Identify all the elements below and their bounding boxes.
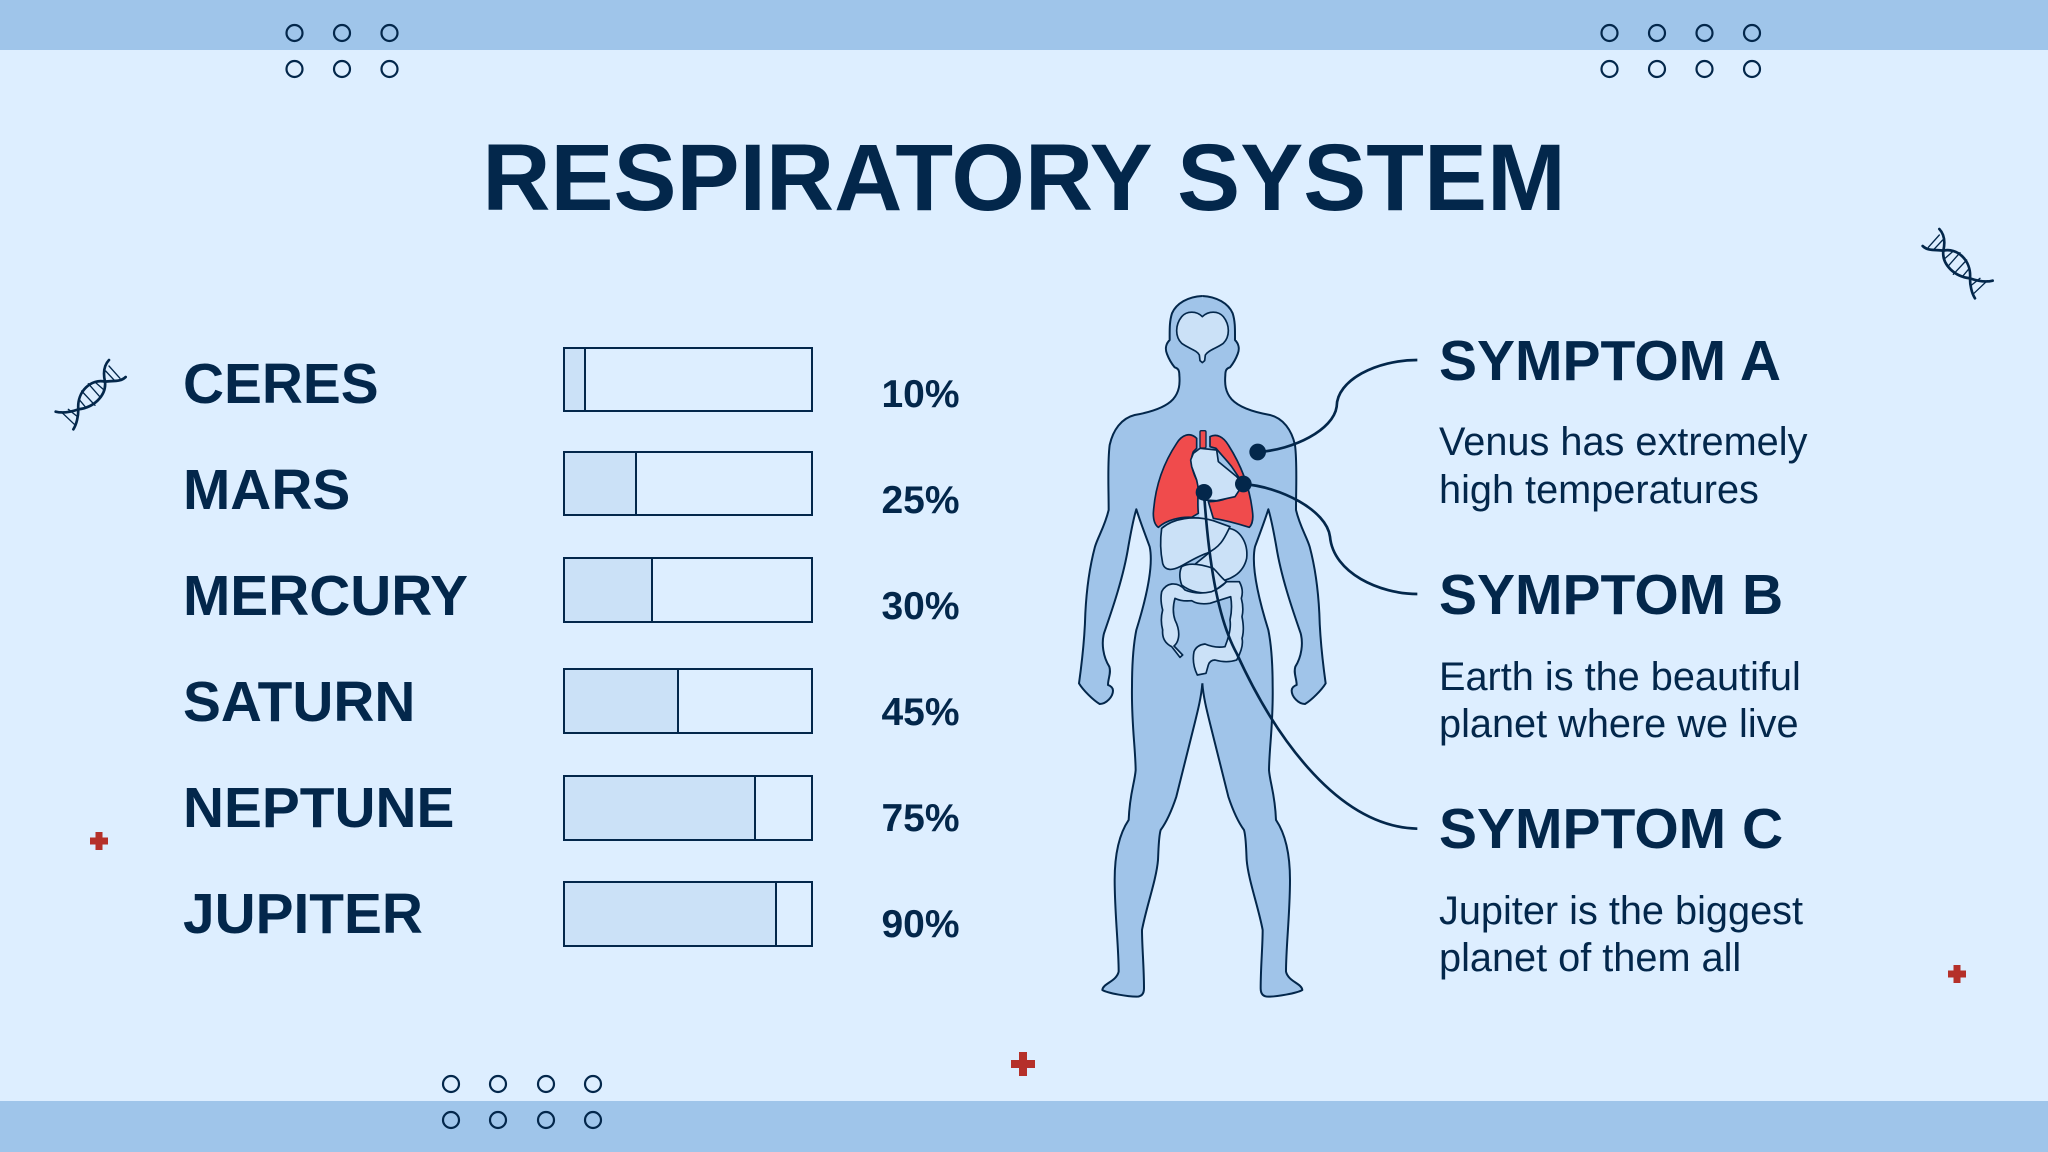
symptom B: [1439, 563, 1801, 746]
symptom A: high temperatures: [1439, 468, 1759, 512]
symptom A: SYMPTOM A: [1439, 329, 1781, 393]
connector lines: [1204, 360, 1417, 829]
row: Mars: 25%: [881, 479, 960, 522]
row: Mars: MARS: [183, 459, 350, 522]
dot grid: top right: [1602, 25, 1760, 77]
icon: dna right: [1923, 229, 1993, 298]
heart: [1191, 448, 1243, 501]
liver: [1161, 518, 1230, 569]
top band: [0, 0, 2048, 50]
lungs: [1153, 435, 1253, 527]
symptom B: SYMPTOM B: [1439, 563, 1783, 627]
row: Mercury: MERCURY: [183, 565, 468, 628]
icon: red cross right: [1948, 965, 1966, 983]
body silhouette: [1079, 296, 1326, 997]
connector dots: [1196, 444, 1266, 501]
dot grid: bottom: [443, 1076, 601, 1128]
gap between lungs: [1199, 497, 1213, 522]
symptom C: Jupiter is the biggest: [1439, 889, 1803, 933]
row: Saturn: [183, 669, 960, 734]
symptom A: Venus has extremely: [1439, 420, 1808, 464]
row: Mercury: 30%: [881, 585, 960, 628]
bottom band: [0, 1101, 2048, 1152]
row: Saturn: 45%: [881, 691, 960, 734]
row: Neptune: NEPTUNE: [183, 777, 454, 840]
symptom C: [1439, 797, 1803, 980]
dot grid: top left: [286, 25, 398, 77]
symptom A: [1439, 329, 1808, 512]
symptom C: planet of them all: [1439, 936, 1741, 980]
row: Mars: [183, 452, 960, 522]
panel: bar chart list: [183, 348, 960, 946]
row: Saturn: SATURN: [183, 671, 415, 734]
symptom B: Earth is the beautiful: [1439, 655, 1801, 699]
row: Jupiter: 90%: [881, 903, 960, 946]
symptom C: SYMPTOM C: [1439, 797, 1783, 861]
small intestine: [1180, 564, 1227, 593]
row: Ceres: [183, 348, 960, 416]
icon: dna left: [56, 360, 126, 429]
row: Neptune: [183, 776, 960, 840]
trachea: [1200, 431, 1206, 448]
row: Jupiter: JUPITER: [183, 883, 423, 946]
human body illustration: [1079, 296, 1417, 997]
row: Ceres: CERES: [183, 353, 379, 416]
title: RESPIRATORY SYSTEM: [482, 125, 1566, 231]
row: Jupiter: [183, 882, 960, 946]
row: Mercury: [183, 558, 960, 628]
colon: [1161, 582, 1243, 675]
symptom B: planet where we live: [1439, 702, 1799, 746]
row: Neptune: 75%: [881, 797, 960, 840]
icon: red cross bottom: [1011, 1052, 1035, 1076]
brain: [1177, 312, 1228, 363]
row: Ceres: 10%: [881, 373, 960, 416]
stomach: [1187, 528, 1247, 582]
icon: red cross left: [90, 832, 108, 850]
